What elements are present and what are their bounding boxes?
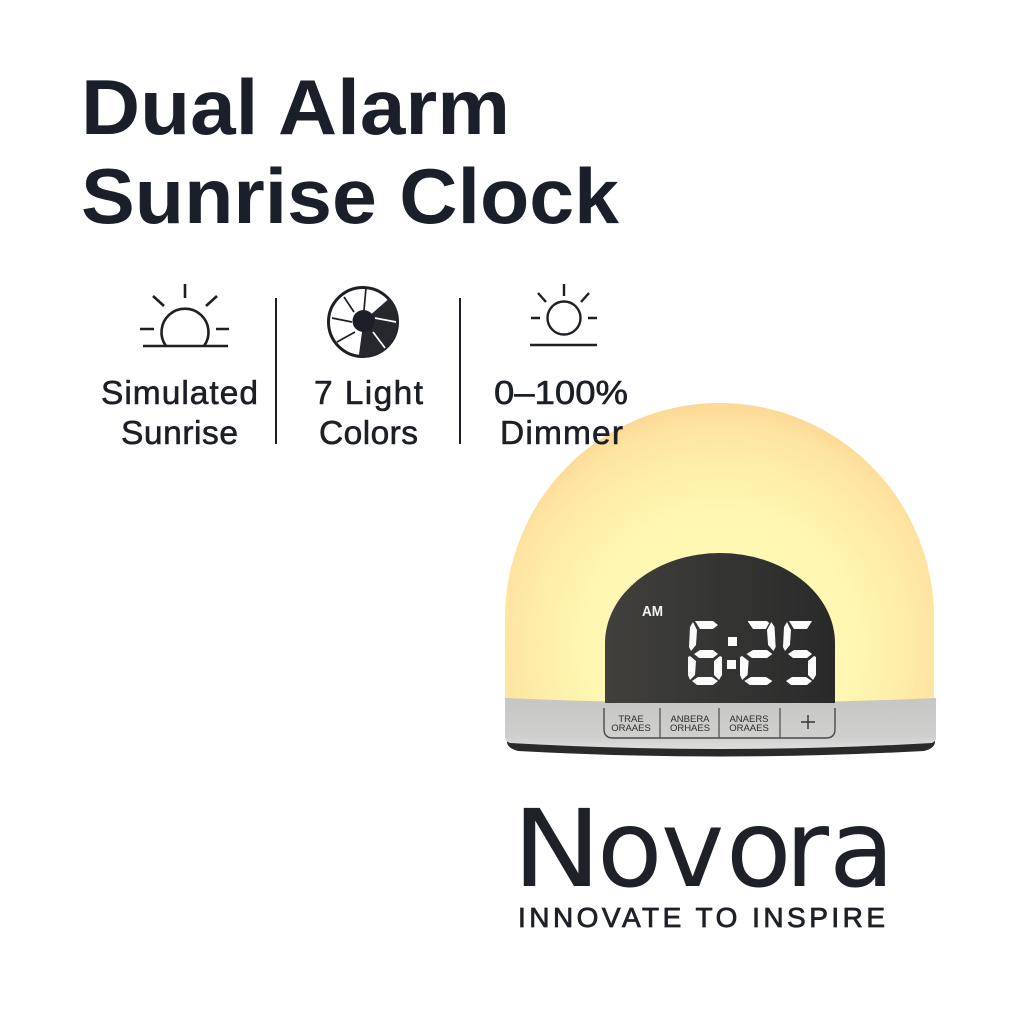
button 2 label: ANBERA <box>670 714 710 725</box>
digit 6 <box>688 621 722 685</box>
label: 7 light colors: 7 Light <box>314 375 424 412</box>
lamp base band <box>505 698 936 749</box>
logo wordmark: N <box>512 787 602 911</box>
button 1 label: ORAAES <box>611 723 651 734</box>
title: Dual Alarm <box>81 63 510 151</box>
logo wordmark: a <box>829 788 895 912</box>
icon: color wheel <box>328 288 398 357</box>
label: simulated sunrise: Sunrise <box>121 415 238 452</box>
product: sunrise clock lamp <box>505 403 936 756</box>
label: dimmer <box>494 375 628 452</box>
button 4 plus <box>801 715 815 729</box>
colon <box>727 637 737 669</box>
label: simulated sunrise <box>101 375 258 452</box>
button 2 label: ORHAES <box>670 723 710 734</box>
tagline: INNOVATE TO INSPIRE <box>518 902 885 933</box>
icon: dimmer sun <box>530 284 597 345</box>
logo wordmark: o <box>726 788 791 912</box>
button 3 label: ORAAES <box>729 723 769 734</box>
divider <box>459 298 461 444</box>
divider <box>275 298 277 444</box>
logo wordmark: r <box>785 788 829 912</box>
label: simulated sunrise: Simulated <box>101 375 258 412</box>
label: 7 light colors <box>314 375 424 452</box>
display face <box>605 553 835 703</box>
icon: simulated sunrise <box>140 284 229 346</box>
title: Sunrise Clock <box>81 152 620 240</box>
digit 2 <box>740 621 776 685</box>
button strip <box>604 708 835 738</box>
label: 7 light colors: Colors <box>319 415 418 452</box>
lamp dome <box>505 403 934 704</box>
logo wordmark: v <box>661 788 724 912</box>
logo wordmark: o <box>597 788 662 912</box>
title <box>81 63 620 240</box>
logo wordmark <box>512 787 895 912</box>
button 3 label: ANAERS <box>729 714 769 725</box>
time readout 6:25 <box>688 621 816 685</box>
label: dimmer: 0–100% <box>494 375 628 412</box>
label: dimmer: Dimmer <box>500 415 623 452</box>
digit 5 <box>783 621 816 685</box>
AM label: AM <box>642 603 663 620</box>
button 1 label: TRAE <box>618 714 644 725</box>
lamp base dark foot <box>507 740 935 756</box>
